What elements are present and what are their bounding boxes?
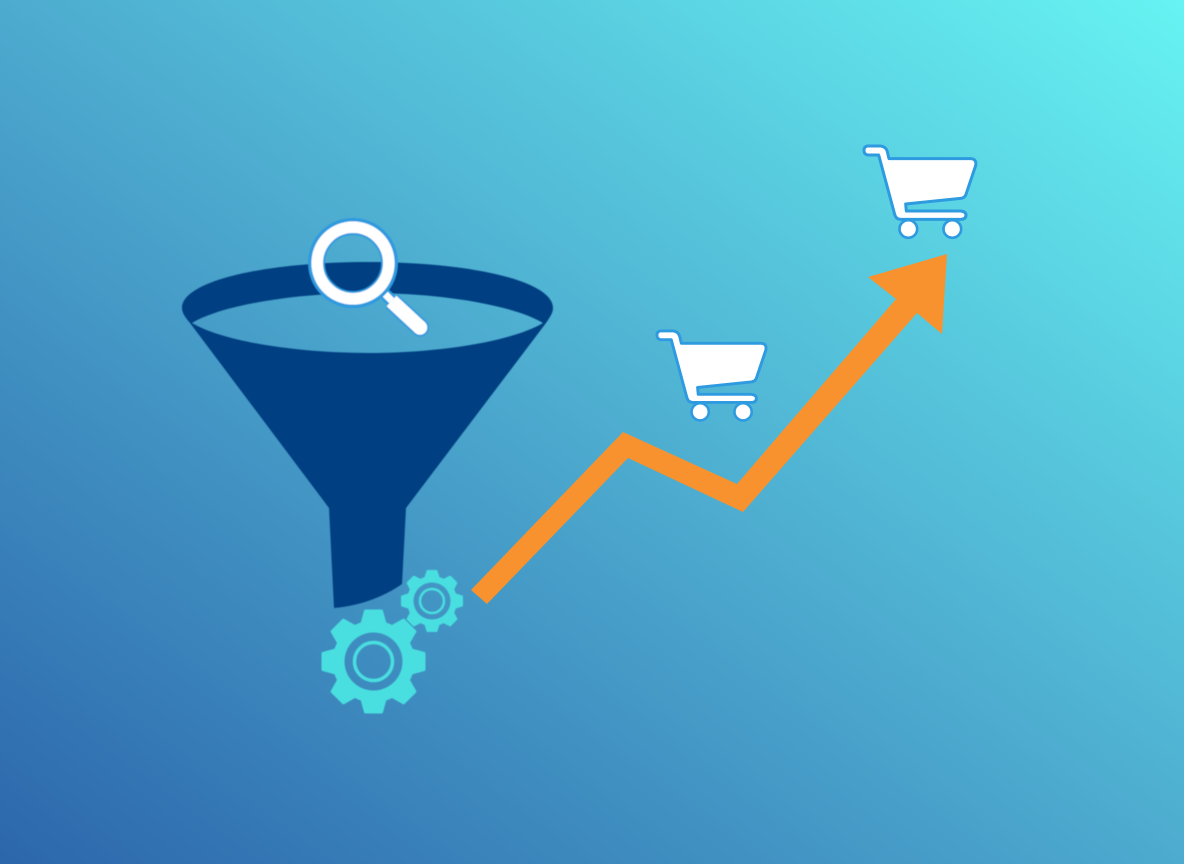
icon: large gear [323,611,424,712]
icon: magnifying glass [316,226,429,336]
icon: shopping cart lower [657,331,766,420]
icon: funnel [182,262,553,608]
icon: small gear [402,571,462,631]
arrow: rising orange trend line [471,254,947,604]
icon: shopping cart upper [864,146,976,238]
